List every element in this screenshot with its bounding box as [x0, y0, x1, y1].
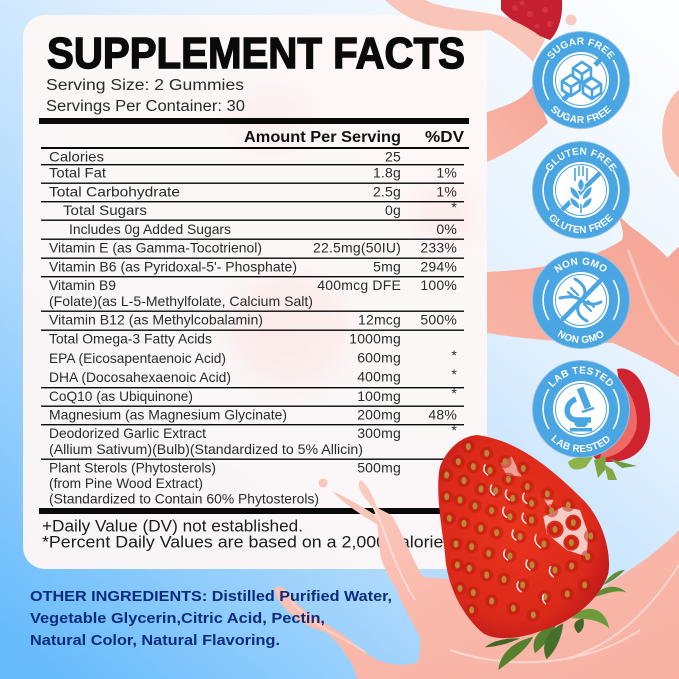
nutrition rows: CoQ10 (as Ubiquinone) [49, 388, 193, 404]
nutrition rows: Plant Sterols (Phytosterols) [49, 460, 216, 476]
nutrition rows: 100% [420, 277, 457, 293]
nutrition rows: Vitamin B6 (as Pyridoxal-5'- Phosphate) [49, 258, 297, 274]
icon: sugar cubes [562, 59, 601, 100]
nutrition rows: 300mg [357, 425, 401, 441]
nutrition rows: Total Carbohydrate [49, 184, 180, 200]
nutrition rows: Magnesium (as Magnesium Glycinate) [49, 406, 287, 422]
nutrition rows: 294% [420, 258, 457, 274]
badge: lab tested [532, 360, 630, 458]
nutrition rows: 2.5g [373, 184, 401, 200]
badge: lab tested: LAB TESTED [548, 366, 613, 388]
nutrition rows: Total Omega-3 Fatty Acids [49, 330, 212, 346]
icon: wheat [562, 166, 600, 213]
nutrition rows: * [451, 347, 457, 363]
nutrition rows: 500% [420, 312, 457, 328]
splash over card top corner [385, 0, 545, 62]
nutrition rows: 48% [428, 406, 457, 422]
nutrition rows: Vitamin E (as Gamma-Tocotrienol) [49, 240, 262, 256]
nutrition rows: Vitamin B9 [49, 277, 116, 293]
nutrition rows: 400mg [357, 368, 401, 384]
table header: %DV [425, 129, 464, 146]
table rules [39, 118, 469, 514]
nutrition rows: (Folate)(as L-5-Methylfolate, Calcium Salt) [49, 293, 313, 309]
strawberry highlights [500, 457, 588, 557]
table header [244, 129, 464, 146]
nutrition rows: Deodorized Garlic Extract [49, 425, 206, 441]
nutrition rows: 1% [436, 184, 457, 200]
background splash: behind Non GMO badge [487, 212, 679, 377]
nutrition rows: 200mg [357, 406, 401, 422]
badge: sugar free: SUGAR FREE [548, 38, 615, 60]
nutrition rows: 1% [436, 164, 457, 180]
badge: sugar free [532, 31, 630, 129]
nutrition rows: 22.5mg(50IU) [313, 240, 401, 256]
icon: dna [560, 279, 601, 321]
nutrition rows: (Standardized to Contain 60% Phytosterols) [49, 490, 319, 506]
nutrition rows: 1000mg [349, 330, 401, 346]
other ingredients: Vegetable Glycerin,Citric Acid, Pectin, [30, 611, 325, 627]
other ingredients: Natural Color, Natural Flavoring. [30, 633, 280, 649]
nutrition rows: 12mcg [358, 312, 401, 328]
faint strawberry watermark [230, 90, 475, 385]
nutrition rows: * [451, 199, 457, 215]
nutrition rows: 1.8g [373, 164, 401, 180]
serving info: Servings Per Container: 30 [46, 98, 245, 115]
background splash: right side [487, 85, 679, 178]
nutrition rows: 5mg [373, 258, 401, 274]
table header: Amount Per Serving [244, 129, 401, 146]
title: SUPPLEMENT FACTS [47, 28, 465, 77]
icon: whole strawberry [438, 435, 627, 670]
serving info [46, 77, 245, 115]
nutrition rows: 400mcg DFE [317, 277, 401, 293]
nutrition rows: 100mg [357, 388, 401, 404]
icon: strawberry slice [568, 368, 650, 480]
footnotes: +Daily Value (DV) not established. [42, 518, 303, 536]
red cells in highlight [546, 515, 581, 551]
badge: non gmo: NON GMO [554, 258, 607, 273]
nutrition rows: 600mg [357, 350, 401, 366]
nutrition rows: * [451, 385, 457, 401]
footnotes: *Percent Daily Values are based on a 2,000 calorie diet. [42, 534, 482, 552]
badge: gluten free: GLUTEN FREE [546, 148, 617, 172]
other ingredients [30, 589, 392, 649]
nutrition rows: 0g [385, 202, 401, 218]
nutrition rows: DHA (Docosahexaenoic Acid) [49, 369, 231, 385]
badge: non gmo [532, 251, 630, 349]
nutrition rows: 25 [385, 148, 401, 164]
seed glints [484, 465, 553, 604]
nutrition rows: Total Sugars [63, 202, 147, 218]
nutrition rows: * [451, 366, 457, 382]
nutrition rows: * [451, 422, 457, 438]
badge: sugar free: SUGAR FREE [551, 106, 612, 124]
badge: lab tested: LAB RESTED [551, 434, 610, 452]
raspberry [501, 0, 576, 40]
nutrition rows [49, 148, 457, 506]
other ingredients: OTHER INGREDIENTS: Distilled Purified Water, [30, 589, 392, 605]
serving info: Serving Size: 2 Gummies [46, 77, 244, 94]
nutrition rows: Includes 0g Added Sugars [69, 221, 231, 237]
badge: gluten free [532, 141, 630, 239]
milk splash with strawberry base [275, 478, 679, 679]
nutrition rows: Total Fat [49, 164, 106, 180]
strawberry seeds [440, 440, 597, 622]
footnotes [42, 518, 482, 552]
nutrition rows: EPA (Eicosapentaenoic Acid) [49, 350, 226, 366]
panel: supplement facts card [23, 15, 487, 569]
nutrition rows: Calories [49, 148, 104, 164]
nutrition rows: (Allium Sativum)(Bulb)(Standardized to 5% Allicin) [49, 441, 363, 457]
badge: gluten free: GLUTEN FREE [550, 214, 614, 234]
nutrition rows: 233% [420, 240, 457, 256]
nutrition rows: Vitamin B12 (as Methylcobalamin) [49, 312, 263, 328]
nutrition rows: (from Pine Wood Extract) [49, 475, 203, 491]
nutrition rows: 500mg [357, 460, 401, 476]
badge: non gmo: NON GMO [558, 330, 604, 343]
nutrition rows: 0% [436, 221, 457, 237]
icon: microscope [567, 388, 594, 432]
strawberry leaves [485, 570, 627, 670]
